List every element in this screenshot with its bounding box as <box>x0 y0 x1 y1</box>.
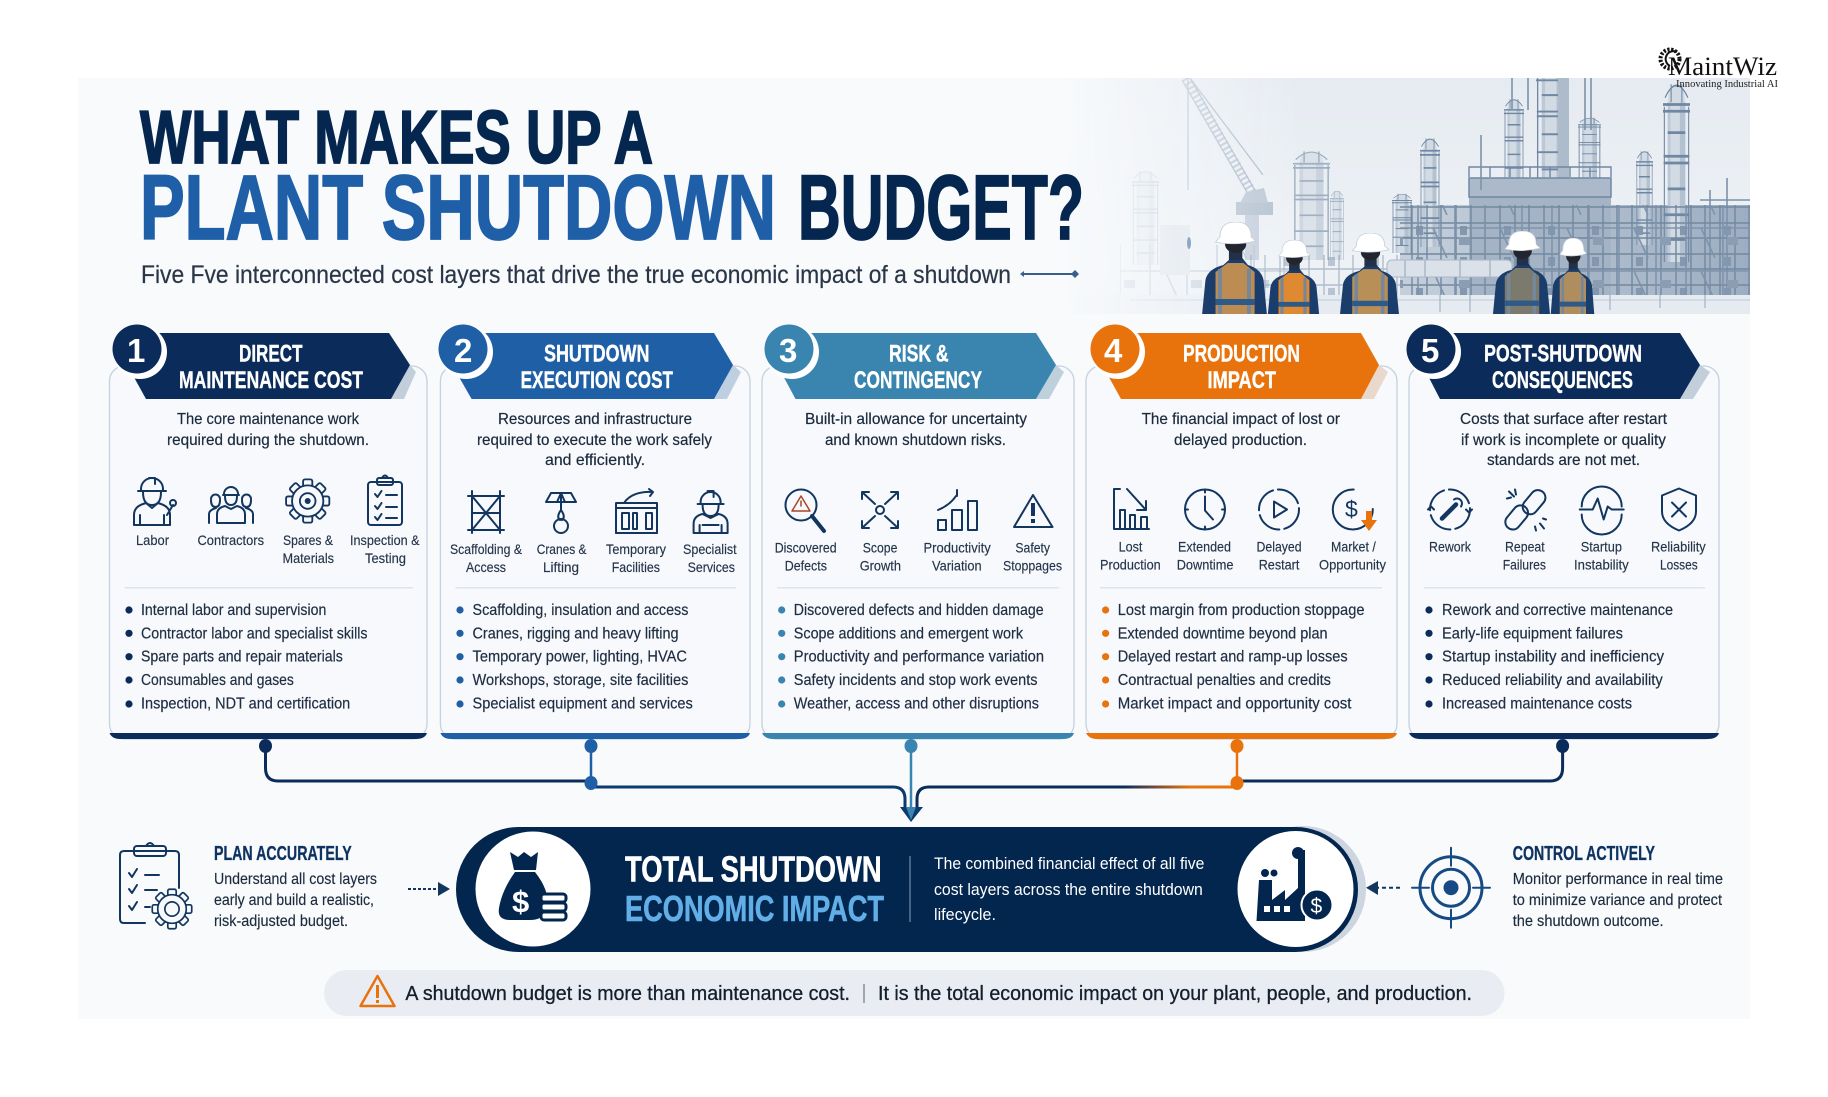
total shutdown economic impact banner: cost layers across the entire shutdown <box>934 880 1203 899</box>
icon: factory with dollar: $ <box>1310 895 1322 918</box>
bottom key message bar: A shutdown budget is more than maintenance cost. <box>405 983 850 1005</box>
icon labels 3 <box>775 540 1062 574</box>
description 1 <box>167 411 369 449</box>
banner 5: 5 <box>1421 332 1439 369</box>
description 2: and efficiently. <box>545 452 645 469</box>
banner 1: DIRECT <box>239 341 303 368</box>
icon labels 5: Rework <box>1429 539 1472 555</box>
icon: temporary facilities <box>616 489 657 533</box>
description 5: standards are not met. <box>1487 452 1640 469</box>
icon: specialist <box>694 491 728 533</box>
callout: plan accurately: risk-adjusted budget. <box>214 913 348 930</box>
bullet list 4: Delayed restart and ramp-up losses <box>1118 649 1348 666</box>
icon labels 3: Growth <box>860 558 901 574</box>
banner 2 <box>438 324 733 399</box>
icon: magnifier defects <box>786 490 824 531</box>
icon labels 1 <box>136 532 420 566</box>
banner 5: CONSEQUENCES <box>1492 367 1633 394</box>
description 2: Resources and infrastructure <box>498 411 692 428</box>
banner 3: RISK & <box>889 341 949 368</box>
logo: MaintWiz: MaintWiz <box>1668 52 1777 81</box>
bullet list 2: Specialist equipment and services <box>472 696 693 713</box>
panel: production impact <box>1086 324 1397 739</box>
banner 1 <box>112 324 410 399</box>
icon labels 2: Scaffolding & <box>450 541 523 557</box>
icon labels 3: Stoppages <box>1003 558 1062 574</box>
icon labels 4: Opportunity <box>1319 556 1386 572</box>
banner 4: IMPACT <box>1208 367 1276 394</box>
bullet list 4: Market impact and opportunity cost <box>1118 696 1352 713</box>
icon: rework <box>1428 490 1472 530</box>
icon: target <box>1412 848 1490 928</box>
icon labels 2 <box>450 541 737 575</box>
panel: direct maintenance cost <box>110 324 427 739</box>
bullet list 5 <box>1425 602 1673 713</box>
icon: lost production <box>1114 489 1149 529</box>
icon labels 4: Delayed <box>1256 539 1302 555</box>
icon labels 3: Safety <box>1015 540 1050 556</box>
icon labels 3: Productivity <box>924 540 991 556</box>
banner 4: PRODUCTION <box>1183 341 1300 368</box>
icon: scaffolding <box>468 491 504 533</box>
icon labels 4: Lost <box>1119 539 1142 555</box>
callout: control actively: to minimize variance and protect <box>1513 892 1723 909</box>
bullet list 5: Increased maintenance costs <box>1442 696 1632 713</box>
icon: inspection clipboard <box>368 476 402 525</box>
description 2: required to execute the work safely <box>477 432 712 449</box>
icon labels 5 <box>1429 539 1706 572</box>
icon labels 5: Losses <box>1660 556 1698 572</box>
icon: productivity variation <box>938 490 977 530</box>
icon labels 3: Scope <box>863 540 898 556</box>
banner 2: SHUTDOWN <box>544 341 649 368</box>
icon: scope growth <box>862 492 898 528</box>
callout: control actively: CONTROL ACTIVELY <box>1513 843 1655 865</box>
callout: plan accurately: PLAN ACCURATELY <box>214 843 352 865</box>
icon labels 2: Cranes & <box>537 541 587 557</box>
icon labels 4: Market / <box>1331 539 1376 555</box>
connector lines into total <box>259 739 1569 822</box>
icon: startup instability <box>1580 486 1624 534</box>
description 4: delayed production. <box>1174 432 1307 449</box>
banner 5 <box>1406 324 1700 399</box>
icon: market opportunity <box>1333 490 1377 531</box>
banner 1: 1 <box>127 332 145 369</box>
icon: contractors <box>209 487 253 523</box>
bullet list 3: Productivity and performance variation <box>794 649 1044 666</box>
bullet list 1: Consumables and gases <box>141 672 294 689</box>
description 3: and known shutdown risks. <box>825 432 1006 449</box>
icon labels 4: Downtime <box>1177 556 1234 572</box>
description 1: required during the shutdown. <box>167 432 369 449</box>
icon: clipboard with gear <box>120 843 192 929</box>
icon: warning triangle <box>360 976 394 1006</box>
bullet list 4 <box>1102 602 1365 713</box>
panel: post-shutdown consequences <box>1406 324 1719 739</box>
description 1: The core maintenance work <box>177 411 360 428</box>
banner 4 <box>1090 324 1379 399</box>
bullet list 2: Cranes, rigging and heavy lifting <box>472 625 678 642</box>
icon: crane hook <box>546 493 576 533</box>
bullet list 3: Discovered defects and hidden damage <box>794 602 1044 619</box>
banner 4: 4 <box>1104 332 1123 369</box>
bullet list 1: Internal labor and supervision <box>141 602 326 619</box>
callout: control actively: the shutdown outcome. <box>1513 913 1664 930</box>
bullet list 3 <box>778 602 1044 713</box>
bullet list 5: Reduced reliability and availability <box>1442 672 1663 689</box>
icon labels 1: Materials <box>282 550 334 566</box>
icon labels 2: Facilities <box>612 559 660 575</box>
banner 3: 3 <box>779 332 797 369</box>
icon labels 1: Contractors <box>198 532 264 548</box>
icon: money bag: $ <box>512 884 529 919</box>
total shutdown economic impact banner: lifecycle. <box>934 905 996 924</box>
icon labels 1: Inspection & <box>350 532 420 548</box>
icon labels 5: Instability <box>1574 556 1629 572</box>
bottom key message bar: It is the total economic impact on your plant, people, and production. <box>878 983 1472 1005</box>
banner 2: EXECUTION COST <box>521 367 673 394</box>
icon: reliability shield <box>1662 488 1696 530</box>
title: PLANT SHUTDOWN <box>140 157 776 259</box>
bullet list 1: Spare parts and repair materials <box>141 649 343 666</box>
icon labels 4: Extended <box>1178 539 1231 555</box>
bullet list 4: Extended downtime beyond plan <box>1118 625 1328 642</box>
description 4 <box>1142 411 1341 449</box>
icon labels 1: Labor <box>136 532 169 548</box>
title <box>140 96 1084 259</box>
panel: risk and contingency <box>762 324 1074 739</box>
background panel <box>78 78 1750 1019</box>
dashed arrow left <box>1366 881 1402 895</box>
icon: delayed restart <box>1259 490 1299 530</box>
bullet list 2: Workshops, storage, site facilities <box>472 672 688 689</box>
logo: MaintWiz <box>1660 50 1779 90</box>
icon labels 3: Variation <box>932 558 982 574</box>
icon labels 5: Repeat <box>1505 539 1545 555</box>
description 3: Built-in allowance for uncertainty <box>805 411 1027 428</box>
total shutdown economic impact banner: ECONOMIC IMPACT <box>625 888 884 929</box>
total shutdown economic impact banner: The combined financial effect of all five <box>934 854 1204 873</box>
subtitle arrow <box>1020 270 1079 278</box>
bullet list 3: Safety incidents and stop work events <box>794 672 1038 689</box>
bullet list 2 <box>456 602 693 713</box>
icon labels 2: Access <box>466 559 506 575</box>
icon: labor <box>134 478 176 525</box>
icon labels 5: Reliability <box>1651 539 1706 555</box>
callout: plan accurately: Understand all cost layers <box>214 871 377 888</box>
icon labels 2: Specialist <box>683 541 737 557</box>
bullet list 5: Startup instability and inefficiency <box>1442 649 1664 666</box>
banner 1: MAINTENANCE COST <box>179 367 363 394</box>
description 2 <box>477 411 712 469</box>
banner 3: CONTINGENCY <box>854 367 982 394</box>
icon labels 1: Spares & <box>283 532 334 548</box>
subtitle: Five Fve interconnected cost layers that drive the true economic impact of a shutdown <box>141 261 1011 289</box>
bullet list 4: Lost margin from production stoppage <box>1118 602 1365 619</box>
bottom key message bar <box>324 970 1504 1016</box>
bullet list 1: Inspection, NDT and certification <box>141 696 350 713</box>
icon labels 5: Startup <box>1581 539 1622 555</box>
description 5: if work is incomplete or quality <box>1461 432 1666 449</box>
icon: repeat failures broken chain <box>1502 487 1548 533</box>
total shutdown economic impact banner <box>456 826 1366 952</box>
bullet list 3: Weather, access and other disruptions <box>794 696 1039 713</box>
callout: plan accurately: early and build a realistic, <box>214 892 374 909</box>
callout: control actively: Monitor performance in real time <box>1513 871 1723 888</box>
callout: plan accurately <box>120 843 377 930</box>
title: WHAT MAKES UP A <box>140 96 653 180</box>
bullet list 2: Temporary power, lighting, HVAC <box>472 649 687 666</box>
description 5: Costs that surface after restart <box>1460 411 1668 428</box>
bullet list 5: Rework and corrective maintenance <box>1442 602 1673 619</box>
icon: extended downtime clock <box>1185 490 1225 530</box>
icon: spares gear <box>286 479 329 523</box>
icon labels 2: Temporary <box>606 541 666 557</box>
icon labels 1: Testing <box>365 550 406 566</box>
title: BUDGET? <box>798 157 1084 259</box>
icon labels 5: Failures <box>1503 556 1546 572</box>
icon labels 4: Restart <box>1259 556 1299 572</box>
icon: market opportunity: $ <box>1345 496 1358 522</box>
bullet list 1 <box>125 602 368 713</box>
dashed arrow right <box>408 882 450 896</box>
logo: MaintWiz: Innovating Industrial AI <box>1676 79 1779 90</box>
panel: shutdown execution cost <box>438 324 750 739</box>
description 3 <box>805 411 1027 449</box>
icon labels 2: Lifting <box>543 559 579 575</box>
bullet list 2: Scaffolding, insulation and access <box>472 602 688 619</box>
icon labels 4 <box>1100 539 1386 572</box>
banner 5: POST-SHUTDOWN <box>1484 341 1642 368</box>
bullet list 1: Contractor labor and specialist skills <box>141 625 368 642</box>
icon: factory with dollar <box>1256 847 1332 921</box>
callout: control actively <box>1412 843 1723 930</box>
total shutdown economic impact banner: TOTAL SHUTDOWN <box>625 849 882 890</box>
banner 2: 2 <box>454 332 472 369</box>
icon: money bag <box>499 852 566 920</box>
bullet list 3: Scope additions and emergent work <box>794 625 1024 642</box>
icon labels 3: Defects <box>785 558 827 574</box>
bullet list 4: Contractual penalties and credits <box>1118 672 1331 689</box>
description 4: The financial impact of lost or <box>1142 411 1341 428</box>
icon labels 2: Services <box>688 559 735 575</box>
hero photo: refinery and workers <box>1120 78 1750 314</box>
description 5 <box>1460 411 1668 469</box>
icon labels 4: Production <box>1100 556 1161 572</box>
bullet list 5: Early-life equipment failures <box>1442 625 1623 642</box>
icon labels 3: Discovered <box>775 540 837 556</box>
banner 3 <box>764 324 1056 399</box>
icon: safety warning <box>1014 495 1052 527</box>
